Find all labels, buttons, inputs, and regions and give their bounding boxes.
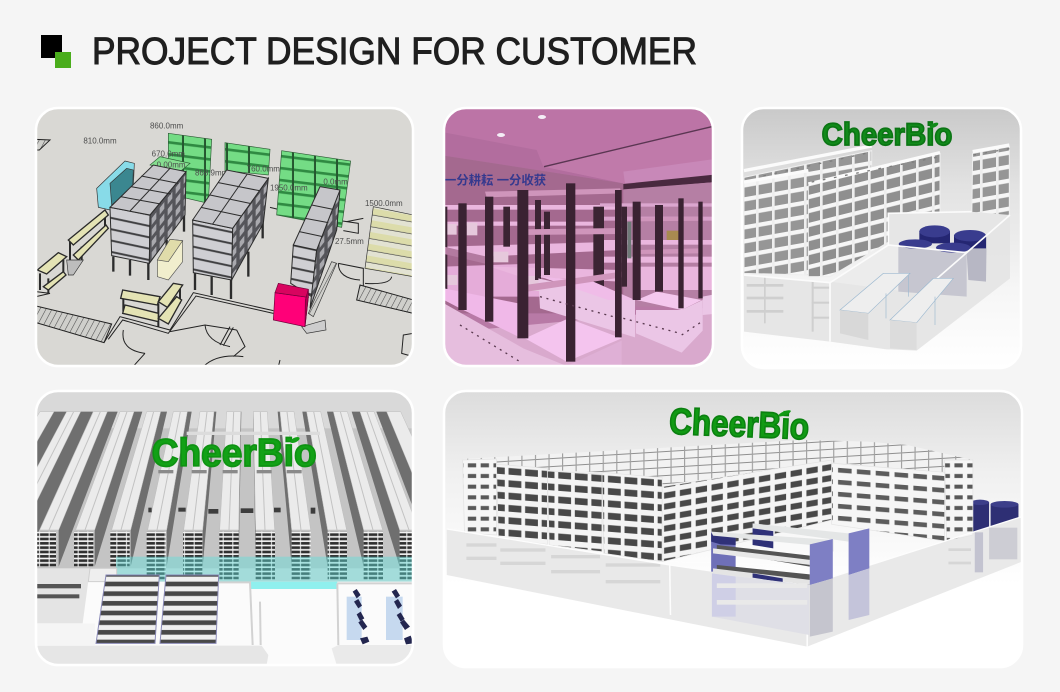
- white rack blocks: [744, 147, 1009, 277]
- CheerBio logo: [822, 121, 952, 146]
- glass wall edges: [447, 517, 1022, 647]
- dimension labels: 868.9mm: [195, 169, 229, 178]
- row side faces: [37, 412, 412, 566]
- panel: large 3D model of full facility: [444, 391, 1022, 667]
- central racks: [96, 575, 219, 643]
- CheerBio logo: CheerBio: [822, 117, 952, 152]
- dimension labels: 0.00mm: [157, 160, 186, 169]
- pale yellow tables: [37, 210, 183, 327]
- ceiling: [440, 100, 720, 167]
- dimension labels: 860.0mm: [150, 121, 184, 130]
- panel: 3D model with tanks: [742, 108, 1021, 368]
- white floor and cyan strip: [30, 582, 420, 668]
- panel: 3D CAD layout drawing: [36, 108, 413, 370]
- partition walls: [219, 582, 413, 645]
- grey plinth and ramp: [67, 260, 337, 333]
- base control dots: [460, 297, 702, 362]
- grey grow racks: [110, 165, 340, 308]
- dimension labels: 670.0mm: [152, 150, 185, 159]
- work benches: [840, 273, 953, 350]
- dimension labels: [83, 121, 403, 246]
- rack top rails: [744, 145, 1009, 184]
- distant rack rows: [444, 203, 720, 297]
- back wall: [440, 155, 623, 313]
- front walls: [36, 646, 268, 665]
- row tops: [37, 412, 412, 530]
- magenta cabinet: [273, 283, 308, 327]
- dimension labels: 1950.0mm: [270, 184, 308, 193]
- wall slogan: 一分耕耘 一分收获: [444, 173, 546, 188]
- back top wireframe: [463, 440, 973, 485]
- front rack posts: [458, 183, 703, 362]
- dimension labels: 27.5mm: [335, 237, 364, 246]
- blue tanks: [899, 225, 986, 253]
- office desks: [347, 589, 413, 644]
- cyan translucent band: [116, 557, 420, 582]
- left storage room: [36, 568, 90, 623]
- glass base: [744, 243, 1010, 350]
- purple room block: [711, 523, 869, 637]
- floor plan walls and doors: [36, 139, 413, 370]
- title: PROJECT DESIGN FOR CUSTOMER: [92, 31, 697, 73]
- panel: aerial model of grow rows: [35, 390, 414, 666]
- panel: installed pink-lit grow room photo: [440, 100, 720, 370]
- CheerBio logo: CheerBio: [668, 402, 810, 448]
- lower rack reflections: [747, 277, 830, 332]
- lower rack reflections: [466, 543, 971, 583]
- cream cabinet: [157, 239, 183, 280]
- right-hand shelf: [365, 207, 413, 277]
- dimension labels: 810.0mm: [83, 137, 117, 146]
- blue tanks: [971, 500, 1018, 532]
- dimension labels: 760.0mm: [247, 164, 280, 173]
- tank bases: [989, 528, 1017, 559]
- row front shelves: [37, 532, 419, 580]
- icon: black and green squares: [41, 35, 71, 68]
- aisle floor: [30, 428, 420, 568]
- row centre tracks: [13, 412, 409, 530]
- glowing platforms: [445, 288, 518, 336]
- dimension labels: 0.0mm: [323, 178, 348, 187]
- inner room wall: [830, 245, 967, 293]
- green shelving racks: [150, 133, 351, 227]
- rack bases: [444, 278, 720, 370]
- CheerBio logo: CheerBio: [152, 432, 317, 475]
- front rack shelves: [444, 188, 703, 292]
- wall pictures: [446, 223, 540, 291]
- floor: [488, 308, 712, 365]
- cyan cabinet: [97, 161, 134, 210]
- glass base: [447, 517, 1022, 647]
- glass walls: [744, 212, 1010, 342]
- mid cross band: [187, 432, 320, 435]
- dimension labels: 1500.0mm: [365, 199, 403, 208]
- rack blocks: [463, 459, 973, 562]
- rail uprights: [763, 149, 1009, 182]
